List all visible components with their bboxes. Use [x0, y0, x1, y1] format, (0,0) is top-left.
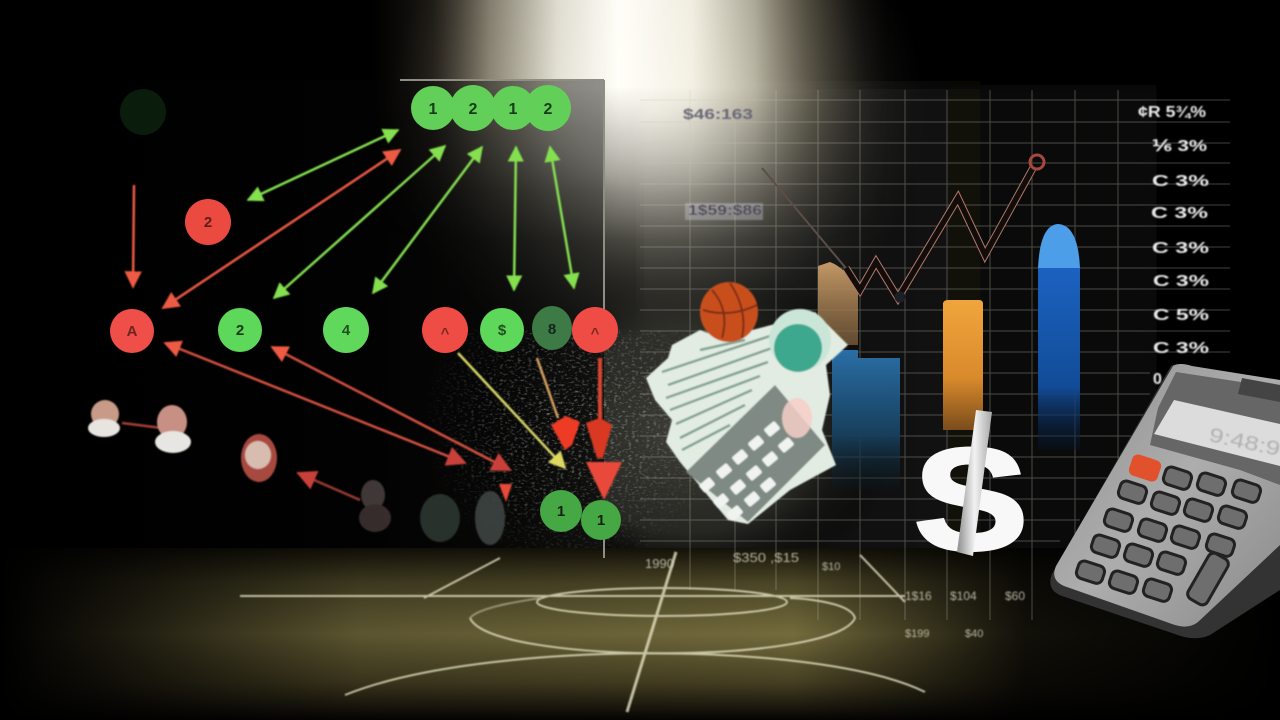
arrows: upper red	[133, 150, 400, 308]
players: middle row: 8	[548, 321, 556, 338]
calculator display	[1154, 400, 1280, 466]
icon: teal ball	[769, 309, 831, 372]
figure 5	[420, 494, 460, 542]
players: middle row	[110, 306, 618, 353]
players: top green row: 1	[509, 101, 518, 118]
bottom chart labels: 1990	[645, 556, 674, 571]
figure 4	[359, 480, 391, 532]
players: middle row: $	[498, 322, 507, 339]
basketball court floor	[0, 548, 1280, 720]
players: top green row: 2	[544, 101, 553, 118]
money bill lines	[662, 336, 772, 450]
diagram frame	[400, 80, 604, 558]
lower chart haze	[480, 260, 900, 600]
arrow: yellow	[458, 353, 565, 468]
icon: large dollar sign: S	[914, 418, 1028, 580]
chart percent labels: C 3%	[1152, 240, 1209, 257]
figure 2	[155, 405, 191, 453]
chart percent labels	[1138, 104, 1209, 388]
players: bottom green pair	[540, 490, 621, 540]
solar panel	[1238, 378, 1280, 402]
chart percent labels: 0	[1153, 371, 1162, 388]
players: bottom green pair: 1	[597, 512, 605, 529]
chart axis labels: $46:163	[683, 106, 753, 123]
arrows: lower red	[122, 343, 510, 500]
icon: money pile with calculator	[646, 282, 848, 524]
chart percent labels: C 3%	[1152, 173, 1209, 190]
chart axis labels	[683, 106, 763, 220]
pink highlight	[782, 398, 812, 438]
players: middle row: 4	[342, 322, 351, 339]
players: top green row: 2	[469, 101, 478, 118]
players: top green row: 1	[429, 101, 438, 118]
bottom chart labels: $60	[1005, 589, 1025, 603]
bottom chart labels: $10	[822, 561, 840, 573]
player: faint dark circle	[120, 89, 166, 135]
calculator shadow edge	[1050, 364, 1280, 638]
panel: diagram tint under the glow	[0, 80, 604, 560]
money stack	[646, 312, 848, 524]
calculator body	[1054, 364, 1280, 627]
arrow: orange	[537, 358, 558, 418]
figures: people illustrations	[88, 400, 505, 545]
chart percent labels: C 5%	[1153, 307, 1209, 324]
spotlight beam	[392, 0, 861, 226]
chart percent labels: C 3%	[1153, 273, 1209, 290]
player: red upper: 2	[204, 214, 212, 231]
arrows: green	[248, 130, 574, 298]
players: middle row: ^	[591, 325, 600, 342]
players: middle row: ^	[441, 325, 450, 342]
panel: chart backdrop	[640, 85, 1240, 565]
bar: tan	[818, 262, 858, 345]
bottom chart labels: $40	[965, 628, 983, 640]
display digits: 9:48:9	[1207, 424, 1280, 461]
chart percent labels: ¢R 5¾%	[1138, 104, 1206, 121]
figure 6	[475, 491, 505, 545]
bar: mid blue	[832, 350, 900, 490]
players: bottom green pair: 1	[557, 503, 565, 520]
players: top green row	[411, 85, 571, 131]
crowd speckle	[432, 330, 696, 548]
spotlight spread	[380, 0, 930, 380]
chart grid	[640, 90, 1230, 620]
mini calculator body	[686, 385, 825, 522]
red key	[1127, 453, 1163, 483]
arrow: red vertical with heads	[499, 358, 622, 502]
mini calculator keys	[698, 421, 795, 521]
bottom chart labels: $199	[905, 628, 929, 640]
chart percent labels: ⅙ 3%	[1152, 138, 1207, 155]
line chart trend	[762, 155, 1044, 302]
calculator upper bezel	[1150, 372, 1280, 485]
bottom chart labels	[645, 550, 1025, 640]
grey keys	[1075, 465, 1262, 607]
bottom chart labels: $104	[950, 589, 977, 603]
chart axis labels: 1$59:$86	[688, 202, 762, 219]
chart percent labels: C 3%	[1151, 205, 1208, 222]
figure 3	[241, 434, 277, 482]
players: middle row: A	[127, 323, 138, 340]
figure 1	[88, 400, 120, 437]
panel: play diagram backdrop	[0, 80, 604, 560]
bar: blue	[1038, 224, 1080, 450]
bar: orange	[943, 300, 983, 430]
bottom chart labels: $350 ,$15	[733, 550, 799, 565]
players: middle row: 2	[236, 322, 244, 339]
player: red upper	[185, 199, 231, 245]
icon: orange basketball	[700, 282, 758, 342]
icon: calculator	[1050, 364, 1280, 638]
bottom chart labels: 1$16	[905, 589, 932, 603]
chart percent labels: C 3%	[1153, 340, 1209, 357]
